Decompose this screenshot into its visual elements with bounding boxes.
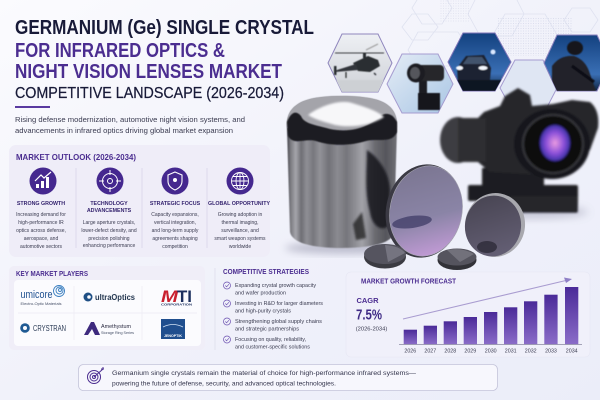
hexagon: helicopter bbox=[328, 34, 392, 92]
logo: ultraOptics: ultraOptics bbox=[95, 292, 135, 302]
bar chart: 2033 bbox=[545, 348, 557, 354]
column: global opportunity: GLOBAL OPPORTUNITY bbox=[208, 201, 270, 207]
CAGR callout: 7.5% bbox=[356, 306, 382, 324]
small lens bbox=[460, 188, 530, 262]
column: technology advancements: TECHNOLOGY bbox=[90, 201, 128, 207]
strategy item 4 bbox=[224, 336, 311, 350]
column: global opportunity: thermal imaging, bbox=[222, 220, 258, 226]
column: global opportunity: Growing adoption in bbox=[218, 212, 262, 218]
subtitle: Rising defense modernization, automotive night vision systems, and bbox=[15, 115, 245, 124]
strategy item 4: and customer-specific solutions bbox=[235, 344, 311, 350]
bar chart: 2031 bbox=[505, 348, 517, 354]
logo: Amethystum bbox=[84, 322, 134, 335]
column: strategic focus: STRATEGIC FOCUS bbox=[150, 201, 201, 207]
strategy item 3 bbox=[224, 318, 323, 332]
heading: market growth forecast: MARKET GROWTH FORECAST bbox=[361, 276, 457, 286]
night vision scope bbox=[440, 88, 598, 219]
column: strategic focus: competition bbox=[162, 244, 188, 250]
column: global opportunity bbox=[208, 168, 270, 250]
subtitle: advancements in infrared optics driving global market expansion bbox=[15, 126, 233, 135]
small disc left bbox=[364, 244, 406, 268]
panel: market outlook bbox=[9, 145, 270, 257]
strategy item 1 bbox=[224, 282, 317, 296]
strategy item 3: Strengthening global supply chains bbox=[235, 319, 323, 325]
logo: Crystran bbox=[20, 323, 66, 333]
strategy item 2: and high-purity crystals bbox=[235, 308, 292, 314]
strategy item 2: Investing in R&D for larger diameters bbox=[235, 301, 324, 307]
logo: MTI bbox=[161, 287, 192, 306]
bar chart: 2026 bbox=[404, 348, 416, 354]
large lens bbox=[377, 157, 471, 265]
bar chart: 2027 bbox=[424, 348, 436, 354]
strategy item 1: Expanding crystal growth capacity bbox=[235, 283, 317, 289]
column: global opportunity: worldwide bbox=[229, 244, 251, 250]
column: strong growth: aerospace, and bbox=[24, 236, 58, 242]
subtitle bbox=[15, 115, 245, 135]
logo: Crystran: CRYSTRAN bbox=[33, 324, 66, 333]
logo: MTI: M bbox=[161, 287, 179, 306]
logo: Jenoptik: JENOPTIK bbox=[164, 334, 182, 338]
CAGR callout: CAGR bbox=[356, 296, 379, 305]
column: strategic focus: agreements shaping bbox=[152, 236, 198, 242]
bar chart: 2030 bbox=[485, 348, 497, 354]
panel: competitive strategies bbox=[215, 267, 324, 350]
column: strategic focus: and long-term supply bbox=[152, 228, 199, 234]
logo: Amethystum: Amethystum bbox=[101, 324, 131, 330]
column: technology advancements: Large aperture crystals, bbox=[83, 220, 135, 226]
bar chart: 2034 bbox=[566, 348, 578, 354]
strategy item 3: and strategic partnerships bbox=[235, 326, 300, 332]
logo: Amethystum: Storage Ring Series bbox=[101, 331, 134, 335]
column: strong growth: optics across defense, bbox=[16, 228, 66, 234]
title: COMPETITIVE LANDSCAPE (2026-2034) bbox=[15, 85, 284, 102]
small disc right bbox=[438, 248, 476, 270]
panel: key market players bbox=[9, 266, 205, 350]
heading: competitive strategies: COMPETITIVE STRATEGIES bbox=[223, 267, 309, 276]
title: NIGHT VISION LENSES MARKET bbox=[15, 61, 282, 83]
hexagon: scope background bbox=[500, 60, 557, 115]
bar chart: 2032 bbox=[525, 348, 537, 354]
column: technology advancements: lower-defect density, and bbox=[81, 228, 137, 234]
bar chart: 2028 bbox=[444, 348, 456, 354]
column: strong growth: automotive sectors bbox=[20, 244, 62, 250]
column: strategic focus bbox=[150, 168, 201, 250]
column: technology advancements bbox=[81, 168, 137, 249]
logo: MTI: TI bbox=[177, 287, 192, 306]
strategy item 1: and wafer production bbox=[235, 290, 286, 296]
column: global opportunity: surveillance, and bbox=[221, 228, 259, 234]
column: strategic focus: Capacity expansions, bbox=[151, 212, 199, 218]
CAGR callout bbox=[356, 296, 387, 332]
hexagon: security camera bbox=[387, 54, 453, 113]
callout: conclusion bbox=[78, 364, 498, 390]
column: strong growth bbox=[16, 168, 66, 250]
logo: umicore bbox=[20, 286, 64, 306]
strategy item 4: Focusing on quality, reliability, bbox=[235, 337, 306, 343]
logo: umicore: umicore bbox=[20, 289, 52, 301]
logo: Jenoptik bbox=[161, 319, 185, 339]
bar chart: 2029 bbox=[464, 348, 476, 354]
column: technology advancements: precision polishing bbox=[88, 236, 130, 242]
hexagon: soldier bbox=[544, 35, 600, 91]
arrow: growth trend bbox=[403, 278, 572, 319]
hexagon: car at night bbox=[448, 33, 511, 91]
column: global opportunity: smart weapon systems bbox=[214, 236, 266, 242]
column: strong growth: high-performance IR bbox=[18, 220, 64, 226]
crystal ingot bbox=[285, 96, 405, 254]
CAGR callout: (2026-2034) bbox=[356, 326, 387, 332]
title: GERMANIUM (Ge) SINGLE CRYSTAL bbox=[15, 17, 314, 39]
heading: key market players: KEY MARKET PLAYERS bbox=[16, 271, 88, 278]
column: technology advancements: enhancing performance bbox=[83, 243, 135, 249]
logo: umicore: Electro-Optic Materials bbox=[20, 302, 62, 306]
strategy item 2 bbox=[224, 300, 324, 314]
heading: market outlook: MARKET OUTLOOK (2026-2034) bbox=[16, 152, 136, 162]
panel: market growth forecast bbox=[346, 272, 590, 357]
bar chart bbox=[399, 287, 582, 354]
icon: target bbox=[88, 367, 104, 384]
column: strong growth: Increasing demand for bbox=[16, 212, 66, 218]
callout: conclusion: Germanium single crystals remain the material of choice for high-performance infrared systems— bbox=[112, 370, 416, 377]
column: strategic focus: vertical integration, bbox=[154, 220, 196, 226]
title: FOR INFRARED OPTICS & bbox=[15, 40, 225, 62]
logo: MTI: CORPORATION bbox=[161, 302, 192, 306]
column: strong growth: STRONG GROWTH bbox=[17, 201, 65, 207]
title bbox=[15, 17, 314, 102]
column: technology advancements: ADVANCEMENTS bbox=[87, 208, 132, 214]
callout: conclusion: powering the future of defense, security, and advanced optical technologies. bbox=[112, 380, 336, 388]
